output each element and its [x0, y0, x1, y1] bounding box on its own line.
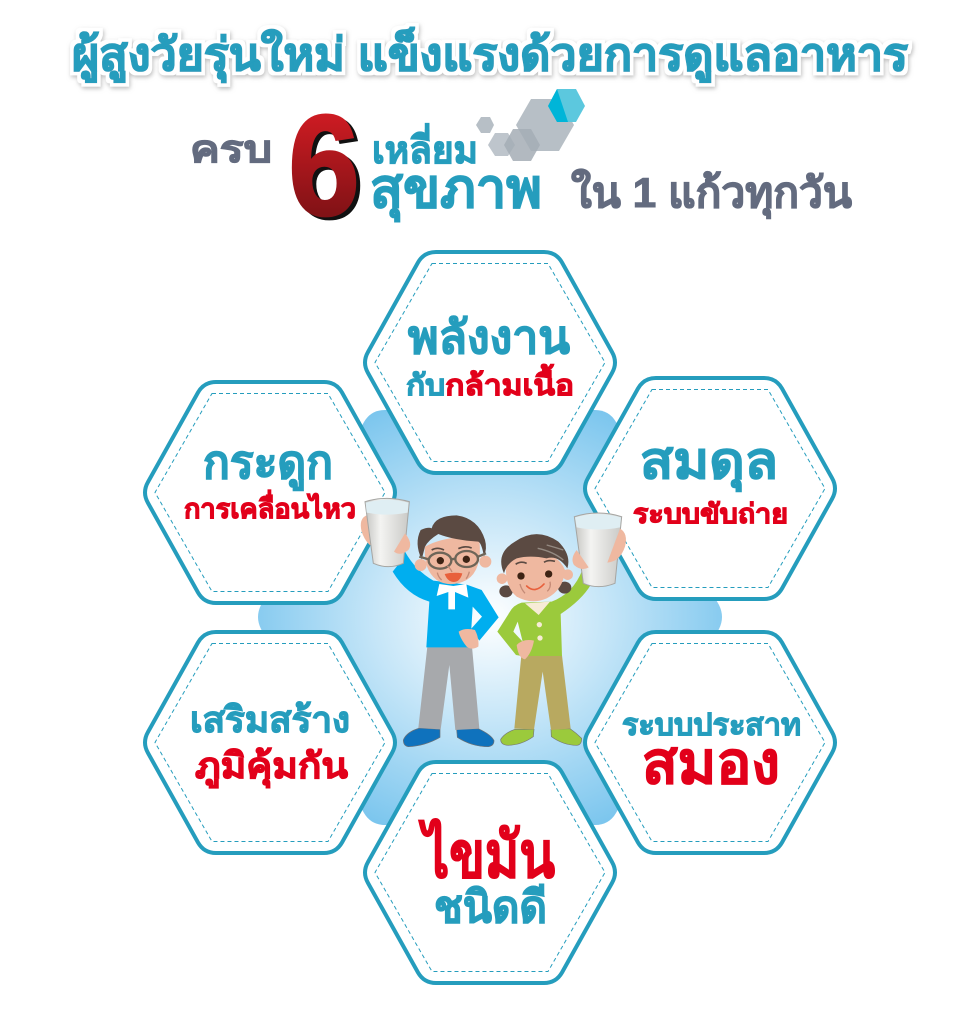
milk glass right — [572, 513, 626, 587]
hexagon: ระบบประสาท สมอง: ระบบประสาท — [622, 709, 801, 742]
hexagon: สมดุล — [585, 378, 835, 599]
hexagon: กระดูก: กระดูก — [203, 436, 333, 491]
hexagon: ไขมัน ชนิดดี: ชนิดดี — [434, 883, 547, 932]
subtitle: ใน 1 แก้วทุกวัน: ใน 1 แก้วทุกวัน — [571, 168, 852, 219]
big number 6: 6 — [292, 88, 364, 249]
man figure — [393, 515, 499, 747]
big number 6: 6 — [288, 85, 360, 246]
hexagon: กระดูก — [145, 382, 395, 603]
hexagon: ระบบประสาท สมอง — [585, 632, 835, 853]
central blue hexagon background — [258, 410, 722, 825]
hexagon: พลังงาน: กับกล้ามเนื้อ — [406, 363, 574, 402]
illustration: elderly couple holding milk — [361, 498, 626, 747]
hexagon: พลังงาน: พลังงาน — [408, 311, 571, 363]
hexagon: ไขมัน ชนิดดี: ไขมัน — [418, 818, 555, 891]
hexagon: ระบบประสาท สมอง: สมอง — [642, 731, 780, 796]
subtitle: เหลี่ยม: เหลี่ยม — [372, 123, 478, 172]
subtitle: ครบ: ครบ — [190, 129, 272, 171]
hexagon: เสริมสร้าง: ภูมิคุ้มกัน — [195, 745, 348, 789]
hexagon: ไขมัน ชนิดดี — [365, 762, 615, 983]
icon: hexagon cluster — [476, 89, 585, 161]
hexagon: สมดุล: สมดุล — [640, 433, 778, 492]
milk glass left — [361, 498, 410, 567]
hexagon: เสริมสร้าง: เสริมสร้าง — [190, 699, 350, 740]
woman figure — [497, 534, 591, 745]
hexagon: สมดุล: ระบบขับถ่าย — [633, 499, 788, 529]
hexagon: เสริมสร้าง — [145, 632, 395, 853]
title: ผู้สูงวัยรุ่นใหม่ แข็งแรงด้วยการดูแลอาหาร — [72, 27, 908, 83]
hexagon: พลังงาน — [365, 252, 615, 473]
hexagon: กระดูก: การเคลื่อนไหว — [184, 489, 356, 524]
subtitle: สุขภาพ: สุขภาพ — [370, 159, 542, 223]
